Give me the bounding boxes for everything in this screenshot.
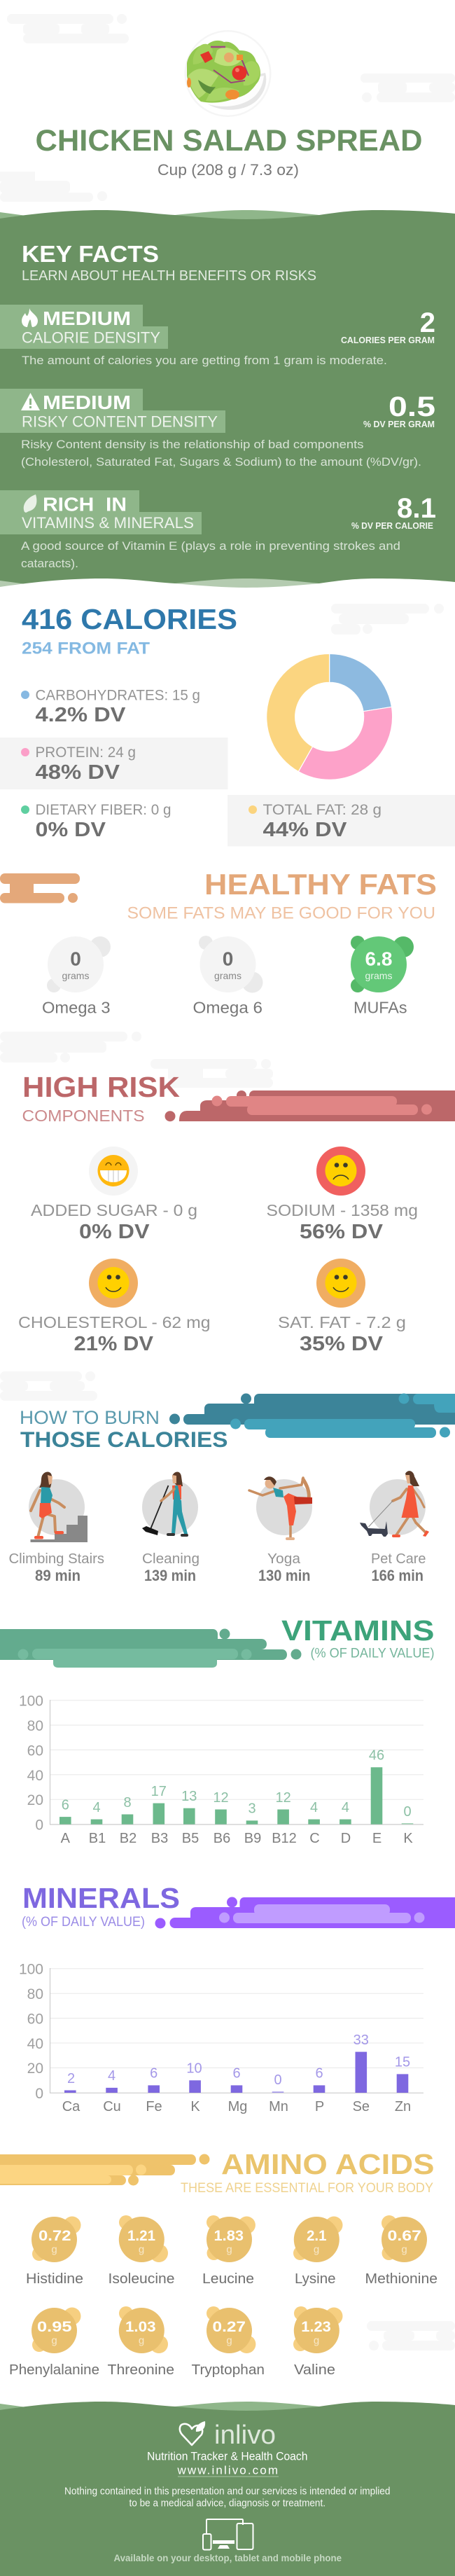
bar chart: minerals: 6 [315,2066,323,2082]
bar chart: vitamins: 3 [248,1801,256,1817]
amino: threonine: 1.03 [125,2319,155,2335]
fact: rich in vitamins and minerals: A good source of Vitamin E (plays a role in preventing strokes and [21,539,400,553]
disclaimer [64,2485,391,2509]
tagline: Nutrition Tracker & Health Coach [147,2450,308,2463]
badge: omega 6: Omega 6 [193,999,262,1017]
bar chart: minerals: 0 [274,2072,282,2088]
bar chart: vitamins: B3 [151,1831,168,1846]
icon: warning [21,393,40,410]
amino: methionine [365,2215,438,2287]
amino: isoleucine [108,2215,175,2287]
amino: valine: Valine [294,2362,335,2378]
activity: yoga [249,1476,312,1584]
panel: footer [0,2402,455,2576]
bar chart: vitamins: B1 [89,1831,106,1846]
amino: valine: g [314,2335,319,2346]
risk item: cholesterol: 21% DV [74,1333,154,1355]
amino: tryptophan: g [226,2335,232,2346]
amino: threonine: g [139,2335,144,2346]
availability note: Available on your desktop, tablet and mobile phone [113,2552,342,2563]
bar chart: vitamins: 4 [92,1800,101,1815]
activity: cleaning: Cleaning [142,1551,200,1567]
bar chart: minerals: Mg [228,2099,247,2114]
legend: dietary fiber [21,802,171,841]
legend: carbohydrates: CARBOHYDRATES: 15 g [35,688,200,704]
amino: lysine [293,2216,343,2287]
bar chart: minerals: 100 [19,1961,43,1978]
fact: risky content density [0,389,435,469]
bar chart: minerals: 33 [354,2033,369,2048]
subheading: from fat: 254 FROM FAT [22,639,150,658]
risk item: added sugar: 0% DV [79,1221,150,1243]
badge: omega 3 [42,936,111,1017]
heading: healthy fats: HEALTHY FATS [204,868,437,901]
decorative banner: burn [169,1394,455,1438]
legend: carbohydrates: 4.2% DV [35,704,126,726]
bar chart: vitamins: 100 [19,1694,43,1709]
amino: leucine: 1.83 [214,2228,244,2244]
amino: lysine: g [314,2244,319,2255]
risk item: sodium: SODIUM - 1358 mg [266,1201,418,1219]
risk item: added sugar: ADDED SUGAR - 0 g [31,1201,197,1219]
bar chart: vitamins: B9 [244,1831,261,1846]
amino: tryptophan: 0.27 [213,2319,246,2335]
decorative banner: vitamins [0,1629,301,1668]
decorative banner: amino acids [0,2154,210,2185]
amino: histidine: 0.72 [38,2228,71,2244]
badge: mufas [351,936,414,1017]
fact: calorie density: 2 [420,307,435,338]
panel: minerals [19,1882,455,2114]
fact: risky content density: 0.5 [388,392,435,422]
legend: total fat [248,802,382,841]
bar chart: vitamins: 4 [310,1800,318,1815]
fact: calorie density [0,305,435,367]
bar chart: minerals: 20 [27,2061,43,2077]
bar chart: vitamins: C [309,1831,320,1846]
badge: mufas: 6.8 [365,948,392,969]
bar chart: vitamins [19,1694,424,1846]
fact: risky content density: % DV PER GRAM [363,420,435,429]
amino: histidine: g [51,2244,57,2255]
activity: climbing stairs [8,1471,104,1584]
activity: climbing stairs: Climbing Stairs [8,1551,104,1567]
badge: omega 3: 0 [70,948,81,969]
amino: threonine [108,2306,174,2378]
legend: protein: 48% DV [35,761,120,784]
badge: omega 6: 0 [223,948,233,969]
bar chart: vitamins: D [341,1831,351,1846]
bar chart: minerals: 6 [150,2066,158,2082]
amino: histidine: Histidine [26,2271,83,2287]
amino: valine: 1.23 [301,2319,331,2335]
activity: yoga: Yoga [267,1551,301,1567]
heading: calories: 416 CALORIES [22,603,237,635]
bar chart: vitamins: 17 [151,1784,167,1799]
bar chart: vitamins: E [372,1831,382,1846]
risk item: added sugar [31,1147,197,1243]
amino: leucine: g [226,2244,232,2255]
activity: cleaning: 139 min [144,1567,196,1584]
fact: calorie density: The amount of calories you are getting from 1 gram is moderate. [22,354,387,367]
bar chart: vitamins: 4 [342,1800,349,1815]
heading: amino acids: AMINO ACIDS [221,2148,434,2180]
bar chart: minerals: 4 [108,2068,115,2084]
amino: tryptophan: Tryptophan [192,2362,265,2378]
panel: key facts [0,210,455,602]
panel: calories [0,603,455,846]
activity: climbing stairs: 89 min [35,1567,80,1584]
heading: how to burn: HOW TO BURN [20,1407,160,1428]
bar chart: vitamins: 46 [369,1748,384,1764]
badge: omega 3: Omega 3 [42,999,111,1017]
decorative banner: high risk [165,1090,455,1121]
fact: rich in vitamins and minerals: 8.1 [397,493,436,524]
fact: rich in vitamins and minerals: RICH IN [43,493,127,515]
amino: methionine: 0.67 [388,2228,421,2244]
fact: calorie density: CALORIE DENSITY [22,329,160,346]
subheading: components: COMPONENTS [22,1107,144,1125]
activity: pet care: 166 min [371,1567,424,1584]
amino: isoleucine: g [139,2244,144,2255]
bar chart: vitamins: A [61,1831,71,1846]
heading: those calories: THOSE CALORIES [20,1427,228,1452]
panel: amino acids [0,2148,438,2378]
bar chart: vitamins: 60 [27,1743,43,1759]
heading: vitamins: VITAMINS [281,1614,434,1647]
bar chart: vitamins: 6 [62,1797,69,1813]
subheading: THESE ARE ESSENTIAL FOR YOUR BODY [181,2181,433,2196]
amino: valine [293,2306,343,2378]
subheading: SOME FATS MAY BE GOOD FOR YOU [127,903,435,923]
legend: protein [21,745,136,784]
legend: dietary fiber: 0% DV [35,819,106,841]
subheading: LEARN ABOUT HEALTH BENEFITS OR RISKS [22,268,316,284]
amino: threonine: Threonine [108,2362,174,2378]
fact: calorie density: CALORIES PER GRAM [341,335,435,345]
risk item: saturated fat: 35% DV [300,1333,384,1355]
icon: leaf [24,494,36,513]
bar chart: minerals: Mn [269,2099,288,2114]
amino: leucine [202,2215,255,2287]
subtitle: serving size: Cup (208 g / 7.3 oz) [158,161,299,179]
risk item: saturated fat: SAT. FAT - 7.2 g [278,1313,406,1331]
bar chart: minerals: 80 [27,1986,43,2002]
bar chart: vitamins: 80 [27,1718,43,1734]
amino: lysine: Lysine [295,2271,336,2287]
bar chart: minerals: P [315,2099,324,2114]
amino: histidine [26,2216,83,2287]
bar chart: vitamins: 0 [403,1804,412,1820]
legend: total fat: TOTAL FAT: 28 g [263,802,382,818]
activity: pet care [360,1471,429,1584]
amino: phenylalanine: g [51,2335,57,2346]
fact: rich in vitamins and minerals [0,490,436,570]
bar chart: vitamins: 8 [123,1795,132,1810]
legend: protein: PROTEIN: 24 g [35,745,136,761]
bar chart: vitamins: B5 [182,1831,199,1846]
bar chart: vitamins: 20 [27,1792,43,1808]
heading: high risk: HIGH RISK [22,1071,180,1103]
amino: isoleucine: Isoleucine [108,2271,175,2287]
fact: risky content density: Risky Content density is the relationship of bad components [21,438,364,451]
amino: tryptophan [192,2306,265,2378]
subheading: (% OF DAILY VALUE) [311,1646,434,1661]
panel: healthy fats [0,868,437,1017]
badge: mufas: MUFAs [354,999,407,1017]
donut chart [267,653,393,780]
fact: risky content density: RISKY CONTENT DENSITY [22,413,218,430]
badge: omega 6 [193,936,263,1017]
fact: rich in vitamins and minerals: cataracts). [21,557,78,570]
risk item: cholesterol [18,1259,210,1355]
panel: high risk components [18,1071,455,1355]
bar chart: vitamins: 0 [35,1817,43,1834]
bar chart: minerals: Fe [146,2099,162,2114]
icon: flame [22,308,38,327]
bar chart: vitamins: B6 [214,1831,230,1846]
heading: minerals: MINERALS [22,1882,180,1914]
fact: rich in vitamins and minerals: % DV PER CALORIE [351,521,433,531]
disclaimer: to be a medical advice, diagnosis or treatment. [129,2498,326,2509]
fact: risky content density: (Cholesterol, Saturated Fat, Sugars & Sodium) to the amount (%DV/gr). [21,455,421,469]
bar chart: minerals: 2 [67,2071,75,2086]
bar chart: minerals: Cu [103,2099,121,2114]
amino: phenylalanine [9,2307,99,2378]
fact: risky content density: MEDIUM [43,392,131,413]
disclaimer: Nothing contained in this presentation and our services is intended or implied [64,2485,391,2498]
bar chart: minerals: 0 [35,2086,43,2102]
fact: rich in vitamins and minerals: VITAMINS & MINERALS [22,514,194,532]
bar chart: minerals: 15 [395,2055,410,2070]
panel: vitamins [0,1614,434,1846]
panel: how to burn calories [8,1394,455,1584]
amino: lysine: 2.1 [307,2228,327,2244]
amino: phenylalanine: Phenylalanine [9,2362,99,2378]
activity: pet care: Pet Care [371,1551,426,1567]
title: CHICKEN SALAD SPREAD [35,124,423,158]
bar chart: minerals: Ca [62,2099,80,2114]
risk item: sodium: 56% DV [300,1221,384,1243]
fact: calorie density: MEDIUM [43,307,131,329]
bar chart: minerals: Se [353,2099,370,2114]
bar chart: minerals: 6 [232,2066,241,2082]
bar chart: minerals: K [190,2099,200,2114]
bar chart: vitamins: K [403,1831,413,1846]
icon: salad bowl [185,30,272,117]
badge: omega 6: grams [214,970,241,981]
risk item: sodium [266,1147,418,1243]
bar chart: minerals: 10 [186,2061,202,2077]
activity: yoga: 130 min [258,1567,311,1584]
logo: inlivo [180,2421,276,2450]
decorative banner: minerals [155,1897,455,1929]
amino: methionine: Methionine [365,2271,438,2287]
bar chart: minerals [19,1961,424,2114]
badge: mufas: grams [365,970,392,981]
bar chart: vitamins: 12 [275,1790,291,1806]
amino: leucine: Leucine [202,2271,254,2287]
logo: inlivo: inlivo [214,2421,276,2450]
bar chart: minerals: 60 [27,2011,43,2027]
website link: www.inlivo.com [176,2464,278,2477]
bar chart: vitamins: B12 [272,1831,297,1846]
amino: phenylalanine: 0.95 [37,2319,72,2335]
badge: omega 3: grams [62,970,89,981]
bar chart: vitamins: 13 [181,1789,197,1804]
amino: isoleucine: 1.21 [127,2228,155,2244]
amino: methionine: g [401,2244,407,2255]
decorative banner: healthy fats [0,873,80,903]
legend: total fat: 44% DV [263,819,347,841]
risk item: cholesterol: CHOLESTEROL - 62 mg [18,1313,210,1331]
bar chart: minerals: Zn [395,2099,411,2114]
bar chart: vitamins: 12 [213,1790,229,1806]
bar chart: vitamins: B2 [120,1831,136,1846]
activity: cleaning [142,1471,200,1584]
heading: key facts: KEY FACTS [22,241,159,267]
icon: devices [203,2519,253,2549]
legend: carbohydrates [21,688,200,726]
bar chart: minerals: 40 [27,2036,43,2052]
risk item: saturated fat [278,1259,406,1355]
subheading: (% OF DAILY VALUE) [22,1915,145,1930]
bar chart: vitamins: 40 [27,1768,43,1784]
legend: dietary fiber: DIETARY FIBER: 0 g [35,802,171,818]
